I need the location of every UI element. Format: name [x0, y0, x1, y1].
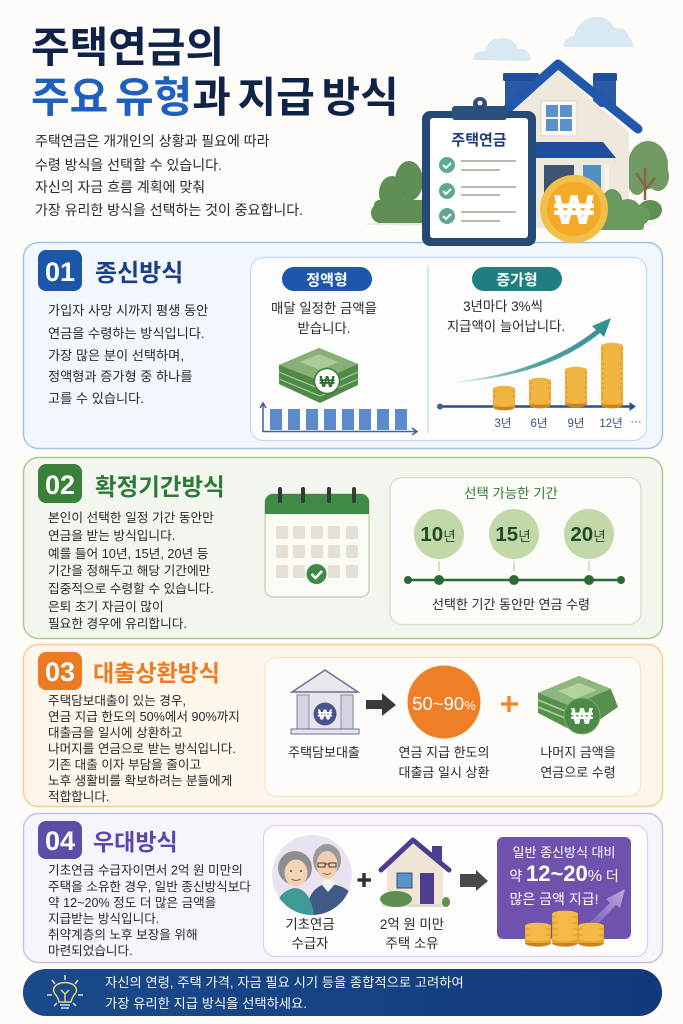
- axis labels: 9년: [568, 417, 584, 430]
- description 03: 대출금을 일시에 상환하고: [48, 726, 182, 740]
- description 01: 정액형과 증가형 중 하나를: [48, 369, 192, 384]
- icon: bank: [291, 670, 359, 734]
- panel: 01 lifetime method: [24, 242, 662, 448]
- arrow: to repayment: [366, 693, 396, 716]
- description 03: 주택담보대출이 있는 경우,: [48, 694, 186, 708]
- period circles: 15년: [495, 523, 531, 546]
- icon: money stack: ₩: [319, 374, 335, 391]
- heading 03: 대출상환방식: [93, 660, 220, 686]
- fixed type description: 받습니다.: [298, 321, 350, 336]
- icon: right tree: [627, 141, 669, 220]
- badge 02: 02: [45, 470, 75, 500]
- description 03: 적합합니다.: [48, 790, 109, 804]
- inner panel: eligibility flow: [264, 826, 648, 956]
- pill: increasing type: 증가형: [496, 272, 538, 289]
- description 04: 주택을 소유한 경우, 일반 종신방식보다: [48, 880, 251, 894]
- description 03: 노후 생활비를 확보하려는 분들에게: [48, 774, 232, 788]
- icon: light bulb: [47, 975, 83, 1008]
- timeline caption: 선택한 기간 동안만 연금 수령: [432, 597, 590, 612]
- caption: lump repayment: 연금 지급 한도의: [399, 745, 489, 760]
- callout: benefit box: 약 12~20% 더: [509, 861, 619, 886]
- badge 04: 04: [45, 826, 75, 856]
- description 02: 연금을 받는 방식입니다.: [48, 529, 175, 543]
- icon: money stack: [279, 348, 358, 403]
- circle: 50~90%: 50~90%: [412, 693, 476, 714]
- description 03: 나머지를 연금으로 받는 방식입니다.: [48, 742, 236, 756]
- title: 주택연금의: [31, 24, 224, 71]
- chart: equal monthly payments: [260, 403, 417, 435]
- badge 04: [38, 821, 82, 859]
- description 04: 취약계층의 노후 보장을 위해: [48, 928, 198, 942]
- icon: clouds: [473, 17, 633, 61]
- checklist: [439, 157, 516, 224]
- icon: coins: [525, 911, 604, 947]
- intro text: 주택연금은 개개인의 상황과 필요에 따라: [35, 133, 270, 149]
- panel: 04 preferential method: [24, 814, 662, 962]
- icon: ground shadow: [365, 222, 655, 226]
- badge 02: [38, 464, 82, 503]
- title: 과 지급 방식: [192, 74, 399, 121]
- circle: 50~90%: [408, 666, 480, 738]
- axis labels: 3년: [495, 417, 511, 430]
- icon: calendar: [265, 489, 369, 597]
- description 03: 연금 지급 한도의 50%에서 90%까지: [48, 710, 240, 724]
- inner panel: annuity types: [250, 258, 646, 440]
- badge 01: 01: [45, 257, 75, 287]
- icon: plus: [358, 873, 371, 887]
- callout: benefit box: [497, 837, 631, 947]
- heading 02: 확정기간방식: [95, 474, 225, 500]
- axis labels: ···: [630, 416, 642, 428]
- description 02: 예를 들어 10년, 15년, 20년 등: [48, 547, 208, 561]
- title: 주요 유형: [31, 74, 192, 121]
- arrow: rising payments: [445, 318, 611, 383]
- description 01: 고를 수 있습니다.: [48, 391, 144, 406]
- heading 01: 종신방식: [95, 260, 183, 287]
- pill: increasing type: [472, 267, 562, 291]
- caption: home owner: 주택 소유: [386, 936, 438, 951]
- intro text: 수령 방식을 선택할 수 있습니다.: [35, 157, 222, 173]
- periods heading: 선택 가능한 기간: [464, 486, 558, 501]
- badge 03: [38, 652, 82, 690]
- badge 03: 03: [45, 657, 75, 687]
- panel: 03 loan repayment method: [24, 644, 662, 806]
- pill: fixed type: 정액형: [306, 272, 348, 289]
- icon: plus: [501, 696, 518, 712]
- description 04: 마련되었습니다.: [48, 944, 133, 958]
- axis labels: [495, 416, 642, 430]
- description 04: 약 12~20% 정도 더 많은 금액을: [48, 896, 216, 910]
- description 02: 필요한 경우에 유리합니다.: [48, 617, 187, 631]
- description 02: 기간을 정해두고 해당 기간에만: [48, 564, 211, 578]
- period circles: 10년: [420, 523, 456, 546]
- icon: won coin: [540, 175, 608, 243]
- icon: money stack with won: [538, 676, 618, 734]
- intro text: 자신의 자금 흐름 계획에 맞춰: [35, 179, 205, 195]
- inner panel: selectable periods: [390, 478, 641, 624]
- icon: left bushes: [371, 161, 426, 223]
- description 02: 집중적으로 수령할 수 있습니다.: [48, 582, 214, 596]
- caption: lump repayment: 대출금 일시 상환: [399, 765, 490, 780]
- icon: house: [503, 64, 638, 228]
- footer message: 가장 유리한 지급 방식을 선택하세요.: [105, 996, 307, 1011]
- caption: remainder: 연금으로 수령: [540, 765, 616, 780]
- pill: fixed type: [282, 267, 372, 291]
- clipboard title: 주택연금: [451, 132, 507, 149]
- period circles: [414, 509, 614, 559]
- description 02: 본인이 선택한 일정 기간 동안만: [48, 511, 214, 525]
- timeline: [404, 561, 625, 585]
- caption: recipient: 기초연금: [285, 917, 335, 932]
- caption: home owner: 2억 원 미만: [380, 917, 444, 932]
- callout: benefit box: 일반 종신방식 대비: [513, 845, 615, 860]
- inner panel: repayment flow: [264, 658, 640, 796]
- description 03: 기존 대출 이자 부담을 줄이고: [48, 758, 201, 772]
- description 01: 가입자 사망 시까지 평생 동안: [48, 303, 208, 318]
- description 02: 은퇴 초기 자금이 많이: [48, 600, 164, 614]
- axis labels: 12년: [599, 417, 623, 430]
- period circles: 20년: [570, 523, 606, 546]
- icon: money stack with won: ₩: [571, 703, 593, 729]
- increasing type description: 지급액이 늘어납니다.: [447, 319, 565, 334]
- icon: front bushes: [598, 189, 650, 230]
- callout: benefit box: 많은 금액 지급!: [510, 891, 598, 907]
- arrow: to benefit: [460, 870, 488, 891]
- caption: mortgage: 주택담보대출: [288, 745, 360, 760]
- chart: growing coin stacks: [437, 343, 635, 410]
- intro text: 가장 유리한 방식을 선택하는 것이 중요합니다.: [35, 202, 303, 218]
- arrow: purple rise: [587, 889, 625, 928]
- footer message: 자신의 연령, 주택 가격, 자금 필요 시기 등을 종합적으로 고려하여: [105, 975, 464, 990]
- description 01: 가장 많은 분이 선택하며,: [48, 348, 184, 363]
- icon: clipboard: [422, 97, 536, 246]
- icon: bank: ₩: [318, 706, 333, 724]
- description 04: 지급받는 방식입니다.: [48, 912, 159, 926]
- description 04: 기초연금 수급자이면서 2억 원 미만의: [48, 864, 243, 878]
- badge 01: [38, 250, 82, 291]
- hero illustration: house, clipboard and coin: [365, 17, 669, 246]
- icon: won coin: ₩: [554, 186, 594, 233]
- caption: recipient: 수급자: [292, 936, 328, 951]
- axis labels: 6년: [531, 417, 547, 430]
- heading 04: 우대방식: [93, 829, 178, 855]
- footer banner: [23, 969, 662, 1016]
- description 01: 연금을 수령하는 방식입니다.: [48, 326, 205, 341]
- icon: elderly couple: [272, 835, 352, 915]
- panel: 02 fixed term method: [24, 458, 662, 638]
- icon: small house: [380, 840, 450, 907]
- caption: remainder: 나머지 금액을: [540, 745, 616, 760]
- increasing type description: 3년마다 3%씩: [463, 299, 543, 314]
- fixed type description: 매달 일정한 금액을: [271, 301, 377, 316]
